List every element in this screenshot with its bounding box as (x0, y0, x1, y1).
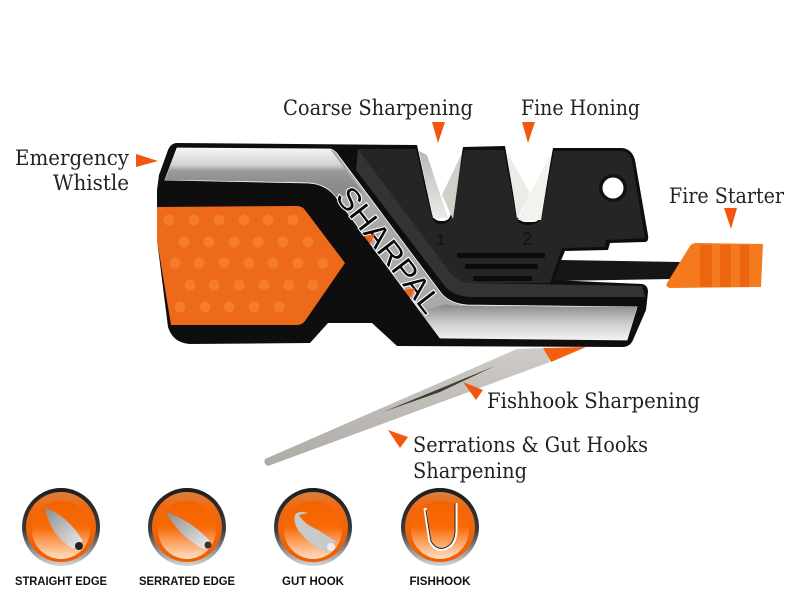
badge: gut hook: GUT HOOK (282, 574, 344, 588)
sharpener body (157, 143, 648, 347)
badge: fishhook: FISHHOOK (410, 574, 471, 588)
arrow: coarse sharpening (432, 122, 445, 143)
label: Serrations and Gut Hooks Sharpening: Sharpening (413, 459, 527, 483)
notch number 2: 2 (522, 229, 532, 249)
diamond sharpening rod (264, 347, 586, 466)
label: Fine Honing: Fine Honing (521, 96, 640, 120)
arrow: fishhook sharpening (463, 382, 483, 400)
badge: gut hook (274, 488, 352, 588)
label: Coarse Sharpening: Coarse Sharpening (283, 96, 473, 120)
grip ridges (457, 253, 545, 281)
icon: gut hook blade (294, 512, 336, 553)
label: Emergency Whistle: Whistle (53, 171, 129, 195)
fire starter rod and handle (550, 243, 763, 288)
highlight of lower plate (420, 304, 637, 340)
textured upper panel (358, 149, 645, 283)
badge: serrated edge (139, 488, 235, 588)
SHARPAL logo: SHARPAL (329, 180, 448, 320)
upper silver plate (165, 148, 637, 340)
arrow: serrations (388, 430, 408, 448)
icon: serrated knife (166, 512, 212, 549)
arrow: fire starter (724, 208, 737, 229)
label: Serrations and Gut Hooks Sharpening (413, 433, 648, 483)
icon: straight knife (45, 508, 83, 550)
label: Fire Starter: Fire Starter (669, 184, 785, 208)
badge: fishhook (401, 488, 479, 588)
label: Serrations and Gut Hooks Sharpening: Serrations & Gut Hooks (413, 433, 648, 457)
label: Emergency Whistle: Emergency (15, 146, 129, 170)
badge: straight edge: STRAIGHT EDGE (15, 574, 107, 588)
arrow: fine honing (522, 122, 535, 143)
fine notch ceramic (507, 152, 552, 220)
badge: serrated edge: SERRATED EDGE (139, 574, 235, 588)
lanyard hole (599, 174, 627, 202)
label: Emergency Whistle (15, 146, 129, 195)
lower grey strip (356, 149, 645, 297)
notch number 1: 1 (437, 232, 446, 249)
arrow: whistle (136, 154, 158, 167)
orange grip (157, 206, 345, 325)
highlight of top plate (165, 148, 362, 197)
icon: fishhook (425, 503, 456, 550)
coarse notch ceramic (419, 151, 462, 219)
badge: straight edge (15, 488, 107, 588)
label: Fishhook Sharpening: Fishhook Sharpening (487, 389, 700, 413)
